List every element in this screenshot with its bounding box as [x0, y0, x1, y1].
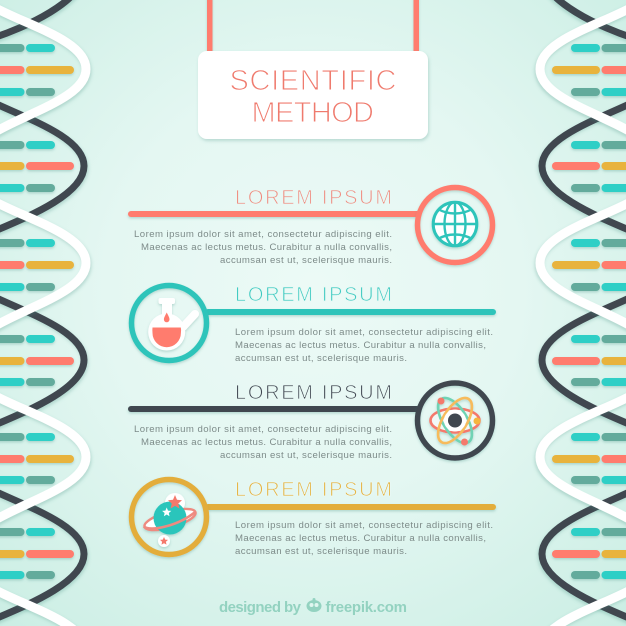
footer credit — [219, 598, 407, 616]
heading: LOREM IPSUM — [235, 479, 392, 501]
icon ring — [418, 383, 492, 458]
heading: LOREM IPSUM — [235, 382, 392, 404]
heading: LOREM IPSUM — [235, 187, 392, 209]
icon ring — [132, 480, 206, 554]
title text: SCIENTIFIC — [230, 65, 396, 97]
body text — [134, 424, 392, 461]
body text: accumsan est ut, scelerisque mauris. — [220, 255, 392, 266]
body text: Lorem ipsum dolor sit amet, consectetur adipiscing elit. — [235, 327, 493, 338]
body text: Lorem ipsum dolor sit amet, consectetur adipiscing elit. — [235, 520, 493, 531]
step 3: dark section — [128, 382, 492, 461]
body text: accumsan est ut, scelerisque mauris. — [235, 546, 407, 557]
connector bar — [128, 406, 420, 412]
icon: planet — [142, 493, 198, 547]
body text: Maecenas ac lectus metus. Curabitur a nulla convallis, — [141, 437, 392, 448]
icon: freepik logo — [306, 598, 322, 612]
body text — [235, 327, 493, 364]
icon ring — [418, 188, 492, 262]
body text — [235, 520, 493, 557]
step 1: coral section — [128, 187, 492, 266]
body text: Maecenas ac lectus metus. Curabitur a nulla convallis, — [141, 242, 392, 253]
body text: accumsan est ut, scelerisque mauris. — [220, 450, 392, 461]
step 2: teal section — [132, 284, 496, 364]
connector bar — [128, 211, 420, 217]
title sign — [198, 0, 428, 139]
body text: Lorem ipsum dolor sit amet, consectetur adipiscing elit. — [134, 229, 392, 240]
right DNA helix — [540, 0, 626, 626]
body text: accumsan est ut, scelerisque mauris. — [235, 353, 407, 364]
step 4: yellow section — [132, 479, 496, 557]
body text: Lorem ipsum dolor sit amet, consectetur adipiscing elit. — [134, 424, 392, 435]
footer credit: designed by — [219, 599, 302, 616]
connector bar — [205, 309, 496, 315]
heading: LOREM IPSUM — [235, 284, 392, 306]
sign panel — [198, 51, 428, 139]
icon ring — [132, 286, 206, 360]
body text — [134, 229, 392, 266]
left DNA helix — [0, 0, 86, 626]
icon: flask — [148, 298, 195, 350]
sign hanger posts — [207, 0, 419, 52]
title text: METHOD — [252, 97, 374, 129]
icon: globe — [433, 202, 477, 246]
footer credit: freepik.com — [326, 599, 407, 616]
icon: atom — [430, 393, 480, 448]
connector bar — [205, 504, 496, 510]
title text — [230, 65, 396, 129]
body text: Maecenas ac lectus metus. Curabitur a nulla convallis, — [235, 340, 486, 351]
body text: Maecenas ac lectus metus. Curabitur a nulla convallis, — [235, 533, 486, 544]
